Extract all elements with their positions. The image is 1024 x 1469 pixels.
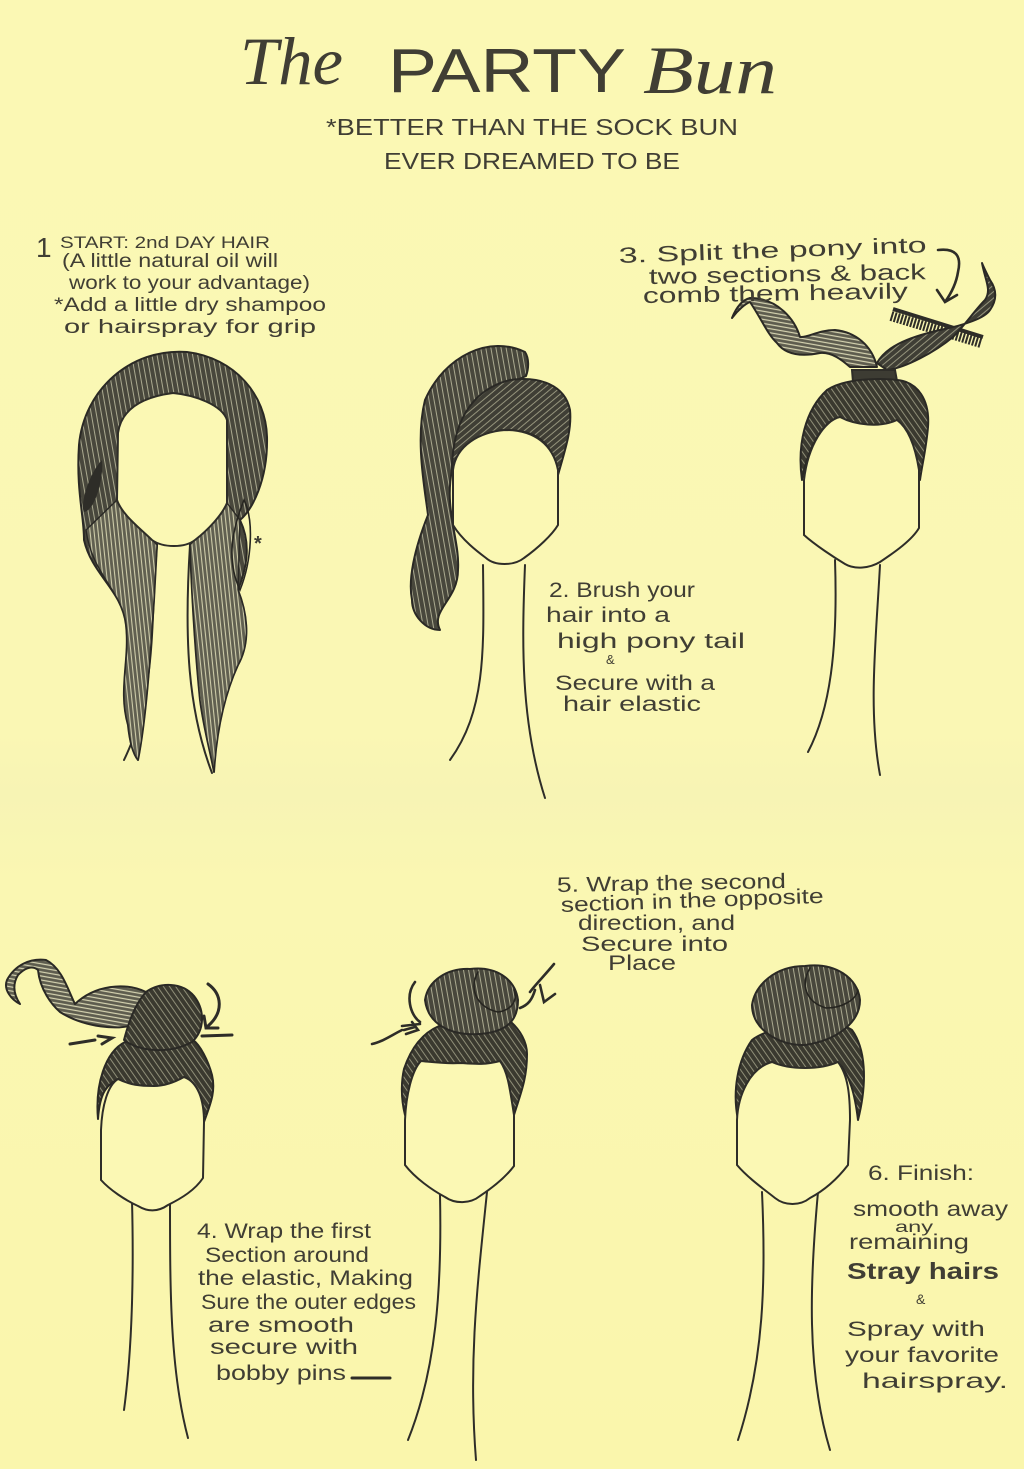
figure 3: split pony with comb [732, 250, 995, 775]
step 2 text [546, 579, 745, 716]
face [737, 1062, 850, 1204]
wrapped tail [6, 960, 146, 1027]
step 6 text: & [916, 1291, 926, 1307]
step 4 text: bobby pins [216, 1362, 346, 1385]
face [117, 393, 227, 546]
step 6 text: hairspray. [862, 1370, 1008, 1393]
step 2 text: & [606, 652, 615, 667]
step 6 text: Stray hairs [847, 1258, 999, 1284]
step 1 text: (A little natural oil will [62, 251, 278, 272]
step 5 text: 5. Wrap the second [557, 870, 786, 897]
step 2 text: hair into a [546, 604, 670, 627]
step 4 text: the elastic, Making [198, 1267, 413, 1290]
step 6 text: remaining [849, 1231, 969, 1254]
step 1 text: work to your advantage) [68, 273, 310, 294]
step 5 text: Secure into [581, 933, 728, 956]
figure 4: first section wrapped [6, 960, 232, 1438]
step 1 text: 1 [36, 232, 52, 263]
step 1 text: *Add a little dry shampoo [54, 295, 326, 316]
title: PARTY [388, 37, 626, 106]
step 6 text: 6. Finish: [868, 1162, 974, 1185]
bun [124, 985, 202, 1050]
face [101, 1077, 204, 1210]
step 4 text: are smooth [208, 1314, 354, 1337]
step 6 text: smooth away [853, 1198, 1009, 1221]
step 1 text: or hairspray for grip [64, 317, 316, 338]
step 5 text [557, 870, 824, 975]
step 5 text: direction, and [578, 912, 735, 935]
step 4 text: Section around [205, 1244, 369, 1267]
step 3 text: 3. Split the pony into [618, 232, 927, 268]
figure 6: finished bun [736, 965, 864, 1450]
figure 5: second section wrapped [372, 964, 555, 1460]
comb [891, 309, 983, 343]
step 5 text: section in the opposite [560, 885, 824, 917]
step 1 text: START: 2nd DAY HAIR [60, 233, 270, 252]
face [804, 417, 919, 568]
title: Bun [643, 32, 777, 108]
step 4 text: secure with [210, 1336, 358, 1359]
face [453, 430, 558, 564]
bun [425, 969, 518, 1034]
subtitle: EVER DREAMED TO BE [384, 148, 680, 174]
step 6 text: Spray with [847, 1318, 985, 1341]
step 4 text: Sure the outer edges [201, 1291, 416, 1314]
step 3 text [618, 232, 927, 308]
pin arrows [372, 964, 555, 1044]
step 4 text [197, 1220, 416, 1385]
subtitle [326, 114, 738, 174]
step 1 text [36, 232, 326, 338]
face [405, 1061, 514, 1202]
step 6 text: any [895, 1219, 933, 1236]
step 2 text: high pony tail [557, 630, 745, 653]
figure 2: side ponytail [411, 346, 570, 798]
step 2 text: 2. Brush your [549, 579, 695, 602]
subtitle: *BETTER THAN THE SOCK BUN [326, 114, 738, 140]
arrow [937, 250, 959, 302]
asterisk: * [254, 533, 262, 555]
step 3 text: comb them heavily [643, 278, 908, 308]
step 2 text: hair elastic [563, 693, 701, 716]
step 5 text: Place [608, 952, 676, 975]
figure 1: long loose hair [78, 352, 267, 773]
title: The [240, 23, 343, 99]
bun [752, 965, 860, 1045]
title [240, 23, 777, 108]
step 6 text [845, 1162, 1009, 1393]
step 6 text: your favorite [845, 1344, 999, 1367]
step 3 text: two sections & back [649, 259, 927, 289]
step 4 text: 4. Wrap the first [197, 1220, 371, 1243]
step 2 text: Secure with a [555, 672, 715, 695]
pin arrows [70, 984, 232, 1044]
